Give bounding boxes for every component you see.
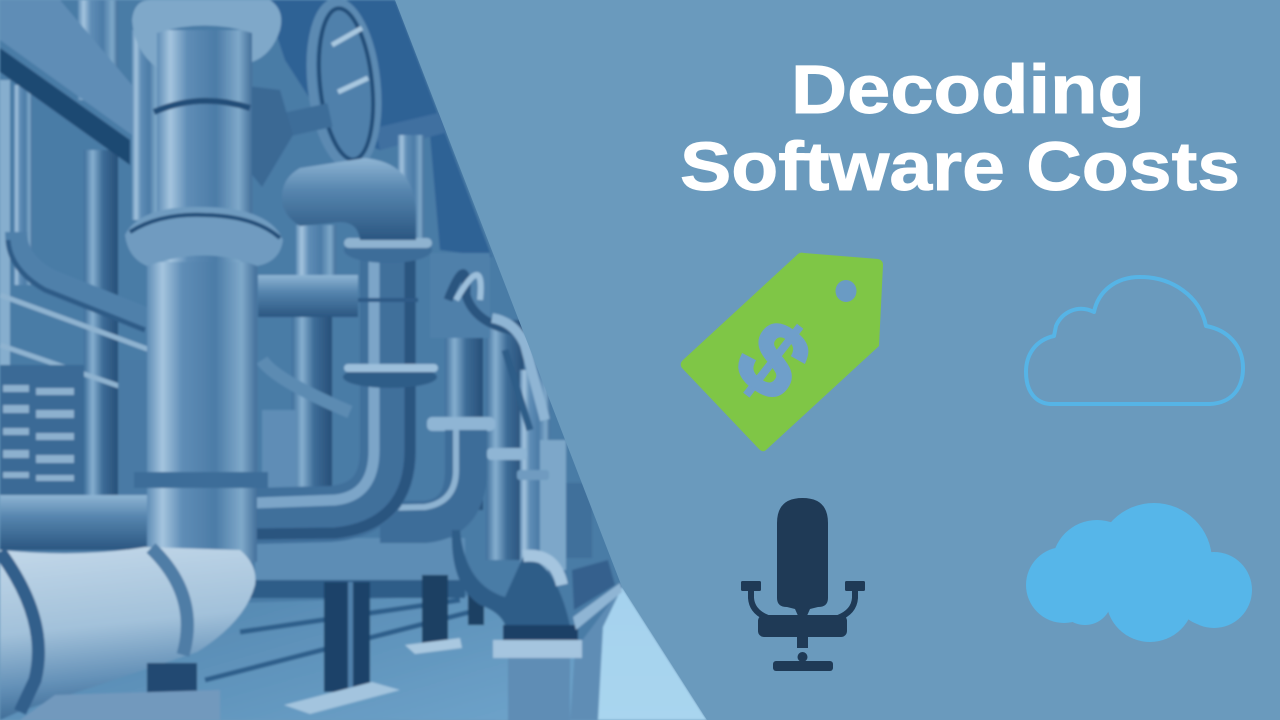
platform debris <box>572 560 615 610</box>
icon: outlined cloud <box>1026 277 1243 404</box>
far elbow pipe <box>380 430 466 522</box>
column ring <box>154 101 250 112</box>
stem <box>797 636 808 648</box>
title line 2: Software Costs <box>680 128 1240 205</box>
big foreground elbow <box>0 547 255 720</box>
upper elbow pipe <box>282 158 416 240</box>
icon: solid cloud <box>1026 503 1252 642</box>
capsule back <box>777 498 828 618</box>
back horizontal pipe <box>0 495 150 550</box>
connecting pipe behind column <box>258 275 358 317</box>
middle elbow pipe <box>255 240 410 534</box>
scene backdrop <box>0 0 622 640</box>
main vertical column <box>125 0 283 562</box>
far background verticals <box>0 0 424 500</box>
dollar sign: $ <box>715 297 832 424</box>
near right elbow and flange <box>452 530 622 720</box>
rack shadow <box>250 580 465 598</box>
light wedge <box>598 587 707 720</box>
thin horizontal rail lines <box>0 295 350 412</box>
tag hole <box>836 280 856 302</box>
dark blue sky area <box>265 0 492 257</box>
middle flanges <box>343 237 438 388</box>
far pipe columns <box>427 253 592 580</box>
middle flange <box>125 207 283 266</box>
building beam upper right <box>378 113 444 149</box>
top flange <box>132 0 281 68</box>
valve hand wheel <box>287 0 382 162</box>
dark diagonal beam <box>0 48 130 165</box>
photo panel: industrial pipework <box>0 0 720 720</box>
base <box>773 661 833 671</box>
near support post <box>284 582 400 714</box>
thin curved pipe left <box>4 231 120 317</box>
pipe rack under elbow <box>255 538 465 580</box>
flange groove <box>130 215 280 238</box>
column band <box>134 472 268 488</box>
upper light beam <box>0 0 132 135</box>
seat <box>758 615 847 637</box>
valve body <box>252 86 292 186</box>
pipe highlight <box>8 240 145 330</box>
icon: dark microphone chair <box>741 498 865 671</box>
far supports <box>405 575 484 654</box>
ornate fittings upper right <box>448 274 545 430</box>
floor <box>2 596 575 720</box>
rack machinery left <box>0 360 296 495</box>
title line 1: Decoding <box>791 51 1145 128</box>
platform rim <box>573 583 622 630</box>
floor dark lines <box>205 600 470 680</box>
foreground concrete support <box>20 663 220 720</box>
title <box>680 51 1240 205</box>
pale wedge pillar <box>570 598 615 720</box>
icon: green price tag <box>681 253 883 451</box>
arms <box>751 588 855 618</box>
